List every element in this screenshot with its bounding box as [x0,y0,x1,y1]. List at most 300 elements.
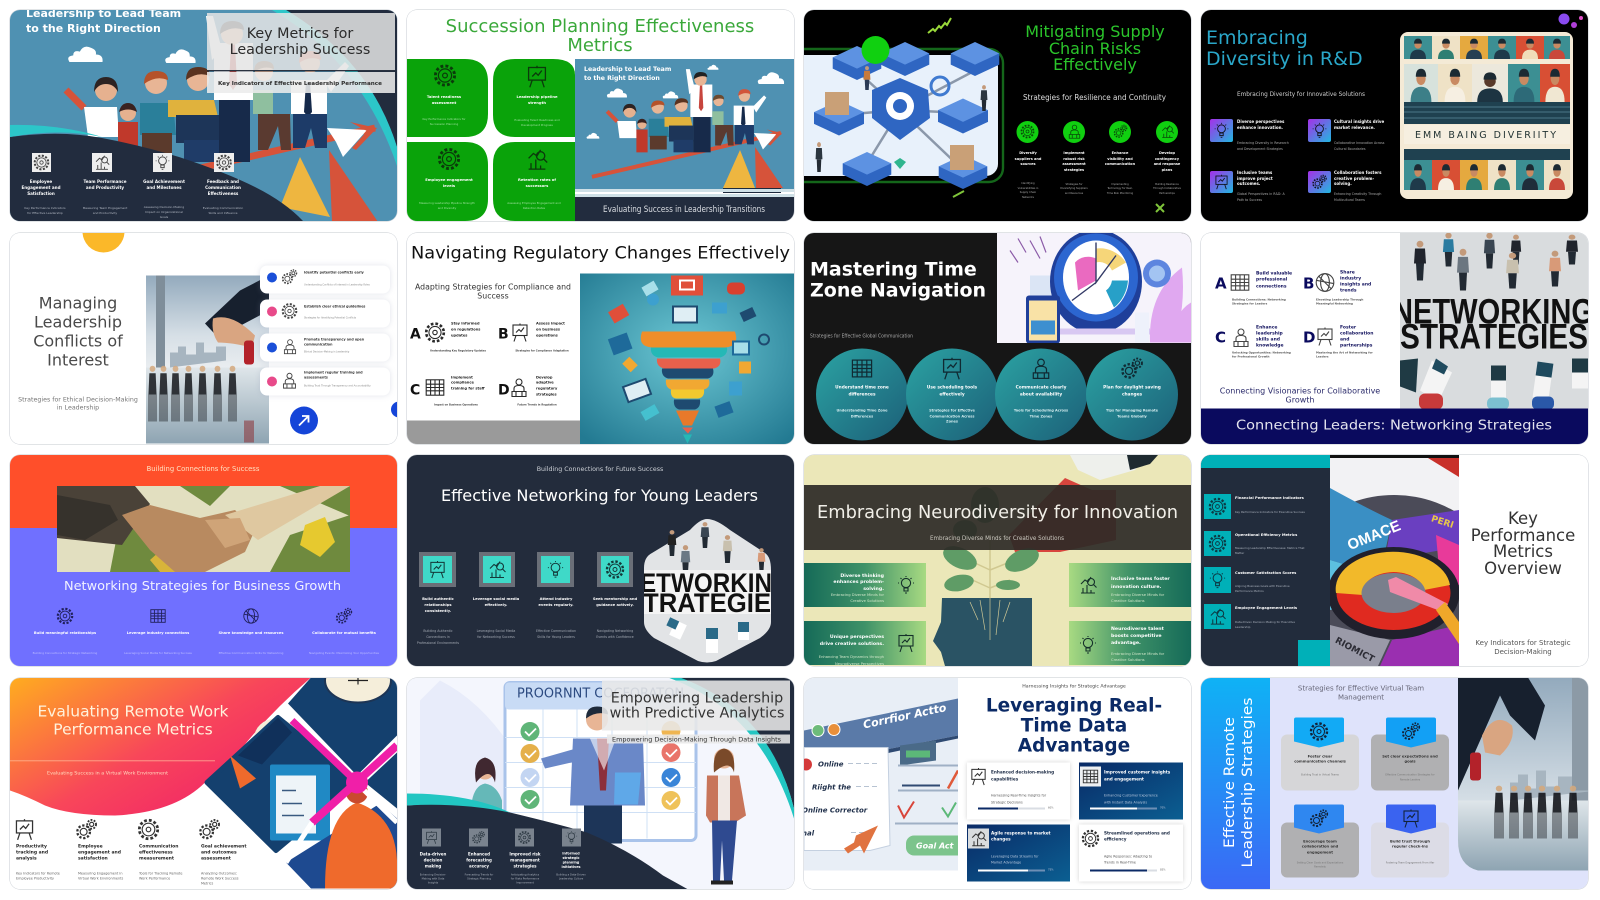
metric descriptions: for Effective Leadership [27,211,63,215]
labels: Foster [1340,324,1357,330]
panel: empowering leadership with predictive analytics [407,678,794,888]
benefit panels [804,563,1191,665]
descriptions: Strategies for Leaders [1232,301,1268,305]
metric descriptions: Measuring Team Engagement [83,206,128,210]
tile descriptions: Key Performance Indicators for [422,117,466,121]
panel: mastering time zone navigation [804,232,1191,444]
step descriptions [430,348,569,406]
step labels: relationships [424,603,452,607]
step numbers [267,272,277,386]
tip descriptions: Differences [851,414,873,418]
benefit labels right: Neurodiverse talent [1111,626,1165,632]
tile labels: Retention rates of [518,178,556,182]
strategy descriptions: Time Risk Monitoring [1107,191,1134,195]
tile labels: Employee engagement [425,178,473,182]
benefit icons [898,576,1096,653]
step labels: Establish clear ethical guidelines [304,304,365,308]
strategy labels: Develop [1159,151,1176,155]
step descriptions: Impact on Business Operations [434,402,478,406]
benefit descriptions right: Creative Solutions [1111,658,1145,662]
step labels: Stay informed [451,321,480,325]
gradient side strip [1201,677,1270,889]
kicker: Building Connections for Success [147,465,260,473]
feature descriptions: Strategic Decisions [991,800,1023,804]
tile labels: strength [528,101,546,105]
outcome labels: Improved risk [509,851,541,856]
step labels: Leverage social media [473,597,520,601]
step labels: consistently. [425,609,452,613]
step descriptions: Skills for Young Leaders [537,635,575,639]
outcome icons [422,828,581,846]
feature labels: Streamlined operations and [1104,830,1170,835]
strategy descriptions: and Resources [1065,191,1084,195]
letters: D [1303,328,1315,346]
subtitle: Empowering Decision-Making Through Data Insights [612,736,781,743]
labels: industry [1340,275,1361,281]
benefit labels right: innovation culture. [1111,584,1162,590]
outcome labels: management [510,857,540,862]
image frame with supply chain illustration [790,42,1003,189]
poster: diversity illustration [1400,32,1573,199]
metric descriptions [16,871,239,885]
progress bars: 85% [1160,867,1166,871]
metric descriptions [1235,510,1305,629]
benefit labels right [1111,576,1170,646]
image: performance gauge: PERI [1430,514,1455,531]
strategy labels: and response [1154,162,1181,166]
feature cards [967,762,1183,881]
strategy labels: Share knowledge and resources [219,631,283,635]
descriptions: Elevating Leadership Through [1316,297,1363,301]
labels: leadership [1256,330,1284,336]
feature labels: Enhanced decision-making [991,769,1054,774]
photo: networking strategies [1392,233,1588,408]
outcome labels: Informed [562,851,580,855]
feature labels [991,769,1171,841]
tip labels: differences [848,391,876,397]
title: Evaluating Remote Work [37,702,229,720]
step labels: compliance [451,380,474,384]
benefit descriptions left: Creative Solutions [850,599,884,603]
strategy labels: Collaborate for mutual benefits [312,631,376,635]
panel: key metrics for leadership success [10,10,397,221]
progress bars: 60% [1048,805,1054,809]
labels: skills and [1256,336,1280,342]
benefit labels right: boosts competitive [1111,633,1162,639]
feature descriptions: Enhancing Customer Experience [1104,793,1158,797]
metric labels: and Milestones [146,185,182,190]
step descriptions: Navigating Networking [597,629,633,633]
metric descriptions: Key Performance Indicators for Executive Success [1235,510,1305,514]
strategy descriptions: Leveraging Social Media for Networking Success [124,651,192,655]
labels: Build valuable [1256,270,1292,276]
subtitle: Key Indicators for Strategic [1475,639,1571,647]
panel: succession planning effectiveness metrics [407,10,794,221]
tile descriptions: Evaluating Talent Readiness and [514,118,560,122]
step labels: events regularly. [538,603,574,607]
benefit labels left: drive creative solutions. [820,641,884,647]
outcome labels: initiatives [561,864,581,868]
strategy labels: Build trust through [1390,839,1430,843]
benefit labels: outcomes. [1237,181,1261,186]
image kicker text: Leadership to Lead Team [584,66,671,73]
labels: Enhance [1256,324,1277,330]
strategy labels: Diversify [1019,151,1038,155]
decorative yellow semicircle [82,210,124,252]
title: Mastering Time [810,258,977,280]
step labels: Build authentic [422,597,454,601]
metric descriptions: Goals [160,215,169,219]
step icons [283,269,297,388]
benefit descriptions: and Development Strategies [1237,147,1283,151]
panel: networking strategies for business growth [10,455,397,666]
step icons [426,323,527,396]
step labels: Develop [536,375,553,379]
tile descriptions: Development Progress [521,123,553,127]
strategy descriptions: Strategies for [1066,182,1083,186]
title overlay panel [207,13,395,93]
benefit labels: improve project [1237,176,1273,181]
decorative dots [1558,14,1583,28]
strategy labels: Implement [1063,151,1085,155]
benefit labels: Inclusive teams [1237,170,1273,175]
outcome descriptions: Enhancing Decision- [420,872,446,876]
image: clock illustration [997,233,1191,343]
title: Advantage [1018,735,1130,756]
benefit descriptions left: Enhancing Team Dynamics through [819,655,885,659]
subtitle: Embracing Diversity for Innovative Solutions [1237,91,1365,98]
benefit descriptions right: Embracing Diverse Minds for [1111,652,1165,656]
subtitle: Strategies for Ethical Decision-Making [18,396,138,403]
strategy labels: Set clear expectations and [1382,754,1438,758]
strategy labels: strategies [1064,168,1084,172]
step labels: regulatory [536,386,558,390]
title: Chain Risks [1049,39,1141,58]
benefit descriptions left [819,593,885,666]
tile descriptions: Succession Planning [430,122,458,126]
tip descriptions: Communication Across [930,414,974,418]
metric labels: Satisfaction [27,191,55,196]
image kicker text: to the Right Direction [584,75,660,82]
tile descriptions: Assessing Employee Engagement and [507,201,561,205]
strategy descriptions: Fostering Team Engagement From Afar [1386,860,1435,864]
strategy labels [1294,754,1438,854]
title: Diversity in R&D [1206,48,1363,70]
metric labels: Employee [78,843,103,849]
tip labels [835,384,1161,397]
illustration: team on arrow [39,16,377,205]
metric descriptions: Skills and Influence [208,211,238,215]
subtitle: Growth [1286,395,1314,404]
labels: insights and [1340,281,1371,287]
tile labels: Leadership pipeline [516,95,558,99]
metric descriptions: Remote Work Success [201,876,239,880]
benefit descriptions [1237,141,1385,202]
step labels: communication [304,342,333,346]
benefit labels: Diverse perspectives [1237,119,1285,124]
benefit descriptions right: Creative Solutions [1111,599,1145,603]
labels: professional [1256,276,1288,282]
corner accent [673,677,794,808]
arrow button [290,406,318,434]
benefit labels left: enhances problem- [833,579,884,585]
footer caption: Evaluating Success in Leadership Transitions [603,205,765,215]
metric descriptions: Work Performance [139,876,170,880]
step cards [260,265,390,395]
curved dark footer [407,804,690,890]
metric descriptions [24,205,243,219]
tip labels: Plan for daylight saving [1103,384,1161,390]
title: Interest [47,350,109,369]
strategy descriptions: Building Connections for Strategic Networking [33,651,98,655]
footer title: Connecting Leaders: Networking Strategies [1236,417,1552,433]
benefit descriptions: Cultural Boundaries [1334,147,1366,151]
image: online form illustration: Online [818,760,844,768]
metric labels: Operational Efficiency Metrics [1235,533,1298,537]
metric labels [21,179,241,196]
outcome descriptions: Strategic Planning [467,876,491,880]
step letters: C [410,382,420,398]
descriptions: Unlocking Opportunities: Networking [1232,350,1291,354]
title band [804,485,1191,550]
strategy descriptions: Diversifying Suppliers [1060,186,1088,190]
metric descriptions: Aligning Business Goals with Executive [1235,584,1290,588]
strategy labels: communication [1105,162,1136,166]
metric labels: Financial Performance Indicators [1235,496,1305,500]
strategy descriptions: Setting Clear Goals and Expectations [1297,860,1344,864]
illustration: hand and watering can [1009,455,1158,552]
image: online form illustration [804,678,958,870]
letters: A [1215,274,1227,292]
benefit descriptions right [1111,593,1165,662]
step descriptions: for Networking Success [477,635,515,639]
illustration: presenter and colleagues [472,706,746,884]
illustration: head silhouette [933,598,1032,666]
hexagon photo [640,519,772,662]
benefit labels: Cultural insights drive [1334,119,1385,124]
strategy descriptions: Building Trust in Virtual Teams [1301,772,1340,776]
image: remote work diamonds [207,658,397,888]
letters: B [1303,274,1314,292]
outcome descriptions: Anticipating Analytics [511,872,540,876]
illustration: sails [280,150,378,222]
step labels: Promote transparency and open [304,337,365,341]
metric labels [1235,496,1305,610]
step labels: strategies [536,392,557,396]
feature descriptions: Market Advantage [991,860,1021,864]
metric descriptions: Assessing Decision-Making [144,205,184,209]
icon tabs [1294,717,1436,833]
outcome descriptions: Leadership Culture [559,876,584,880]
metric descriptions: and Productivity [93,211,117,215]
metric labels: Team Performance [83,179,127,184]
benefit descriptions left: Embracing Diverse Minds for [831,593,884,597]
tip labels: Use scheduling tools [927,384,978,390]
tab icons [1311,723,1419,827]
tile labels: assessment [432,101,456,105]
poster: diversity illustration: EMM BAING DIVERIITY [1415,130,1556,141]
tip descriptions: Understanding Time Zone [836,408,888,412]
outcome descriptions: Insights [428,880,439,884]
photo: chess leader [146,276,269,444]
outcome labels: strategies [514,863,537,868]
metric labels: Feedback and [207,179,239,184]
title: Embracing Neurodiversity for Innovation [817,502,1178,523]
tip labels: effectively [939,391,965,397]
step labels: assessments [304,375,328,379]
title: Overview [1484,559,1562,578]
benefit descriptions: Global Perspectives in R&D: A [1237,192,1285,196]
metric descriptions: Metrics [201,881,214,885]
metric labels: Communication [139,843,178,849]
strategy labels: assessment [1062,162,1086,166]
labels: partnerships [1340,342,1373,348]
strategy descriptions: Technology for Real- [1107,186,1133,190]
step labels: Implement [451,375,473,379]
descriptions [1232,297,1373,358]
photo: chess leader [1458,678,1588,870]
title: Performance Metrics [53,720,213,738]
outcome descriptions: for Risks Performance [511,876,540,880]
labels: collaboration [1340,330,1373,336]
title: Effectively [1053,55,1137,74]
metric labels: Communication [205,185,241,190]
slide kicker text: to the Right Direction [26,22,161,35]
feature labels: capabilities [991,776,1019,781]
vertical title: Effective Remote [1222,716,1238,848]
metric descriptions: Data-Driven Decision Making for Executive [1235,620,1295,624]
benefit descriptions: Embracing Diversity in Research [1237,141,1289,145]
step labels: Implement regular training and [304,370,363,374]
descriptions: Meaningful Networking [1316,301,1353,305]
photo: handshake [57,486,350,572]
green metric tiles [407,59,575,221]
feature labels: and engagement [1104,776,1144,781]
outcome labels: decision [424,857,442,862]
tile labels: successors [526,184,549,188]
tile icons [435,66,547,169]
step letters: D [498,382,510,398]
metric descriptions: Key Performance Indicators [24,206,66,210]
step descriptions: Future Trends in Regulation [517,402,557,406]
tile descriptions: Retention Rates [523,206,546,210]
side panel [1201,455,1330,666]
title: Time Data [1021,715,1127,736]
feature labels: Improved customer insights [1104,769,1171,774]
panel: leveraging real-time data advantage [804,678,1191,888]
benefit icons [1210,119,1331,193]
labels: trends [1340,287,1357,293]
outcome descriptions [420,872,586,884]
strategy descriptions: Vulnerabilities in [1018,186,1039,190]
strategy cards [1281,734,1449,877]
strategy descriptions: Effective Communication Skills for Networking [219,651,284,655]
benefit descriptions: Path to Success [1237,198,1262,202]
image: performance gauge [1330,455,1459,666]
tip descriptions [836,408,1159,423]
icons [1231,273,1334,346]
title: Key [1508,509,1538,528]
step labels: guidance actively. [596,603,634,607]
strategy descriptions: Navigating Events: Maximizing Your Opportunities [309,651,380,655]
benefit labels left [820,573,884,647]
strategy descriptions [33,651,380,655]
progress bars: 75% [1048,867,1054,871]
feature descriptions: Leveraging Data Streams for [991,854,1039,858]
outcome labels [420,851,581,868]
descriptions: Mastering the Art of Networking for [1316,350,1373,354]
tip descriptions: Strategies for Effective [929,408,976,412]
subtitle: Key Indicators of Effective Leadership Performance [218,81,383,87]
tip labels: changes [1122,391,1142,397]
strategy icons [1016,121,1178,143]
metric labels: Engagement and [21,185,61,190]
progress bars [978,805,1166,871]
subtitle: Embracing Diverse Minds for Creative Solutions [930,536,1064,542]
metric labels: measurement [139,855,175,861]
decorative green dot [862,36,890,64]
strategy labels: communication channels [1294,759,1347,763]
step labels [451,321,565,396]
icon: clouds [68,47,196,63]
panel: mitigating supply chain risks [804,10,1191,221]
metric descriptions: Measuring Engagement in [78,871,123,875]
step labels: on business [536,327,560,331]
strategy labels: contingency [1155,157,1180,161]
subtitle: Strategies for Effective Global Communication [810,333,913,339]
subtitle: in Leadership [57,404,99,411]
strategy descriptions: Supply Chain [1020,190,1037,194]
outcome labels: Enhanced [468,851,490,856]
metric labels: Customer Satisfaction Scores [1235,571,1297,575]
labels: Share [1340,269,1355,275]
strategy labels: plans [1162,168,1172,172]
metric descriptions: Key Indicators for Remote [16,871,60,875]
feature descriptions [991,793,1158,864]
feature descriptions: Harnessing Real-Time Insights for [991,793,1047,797]
subtitle: Success [477,291,509,300]
step letters: B [498,326,509,342]
metric descriptions: Employee Productivity [16,876,54,880]
tile descriptions: Measuring Leadership Pipeline Strength [419,201,475,205]
metric icons [32,153,234,172]
subtitle: Connecting Visionaries for Collaborative [1220,386,1380,395]
strategy descriptions: Networks [1022,195,1035,199]
step letters: A [410,326,421,342]
illustration: plant [939,487,1043,598]
metric labels: Productivity [16,843,47,849]
kicker: Harnessing Insights for Strategic Advantage [1022,683,1126,689]
outcome labels: planning [563,860,580,864]
tip icons [852,357,1142,379]
tip descriptions: Time Zones [1030,414,1052,418]
step icons [419,552,633,587]
step descriptions: Professional Environments [417,641,459,645]
panel: navigating regulatory changes [407,232,794,444]
strategy labels: visibility and [1107,157,1133,161]
letters [1215,274,1315,346]
feature labels: efficiency [1104,836,1127,841]
panel: evaluating remote work performance [10,678,397,888]
image: performance gauge: RIOMICT [1333,636,1376,665]
strategy descriptions: Identifying [1021,181,1035,185]
tip labels: Communicate clearly [1016,384,1067,390]
strategy labels: Build meaningful relationships [34,631,96,635]
image: online form illustration: Goal Act [916,841,955,850]
metric labels: tracking and [16,849,48,855]
benefit labels right: advantage. [1111,640,1141,646]
outcome descriptions: Improvement [516,880,534,884]
